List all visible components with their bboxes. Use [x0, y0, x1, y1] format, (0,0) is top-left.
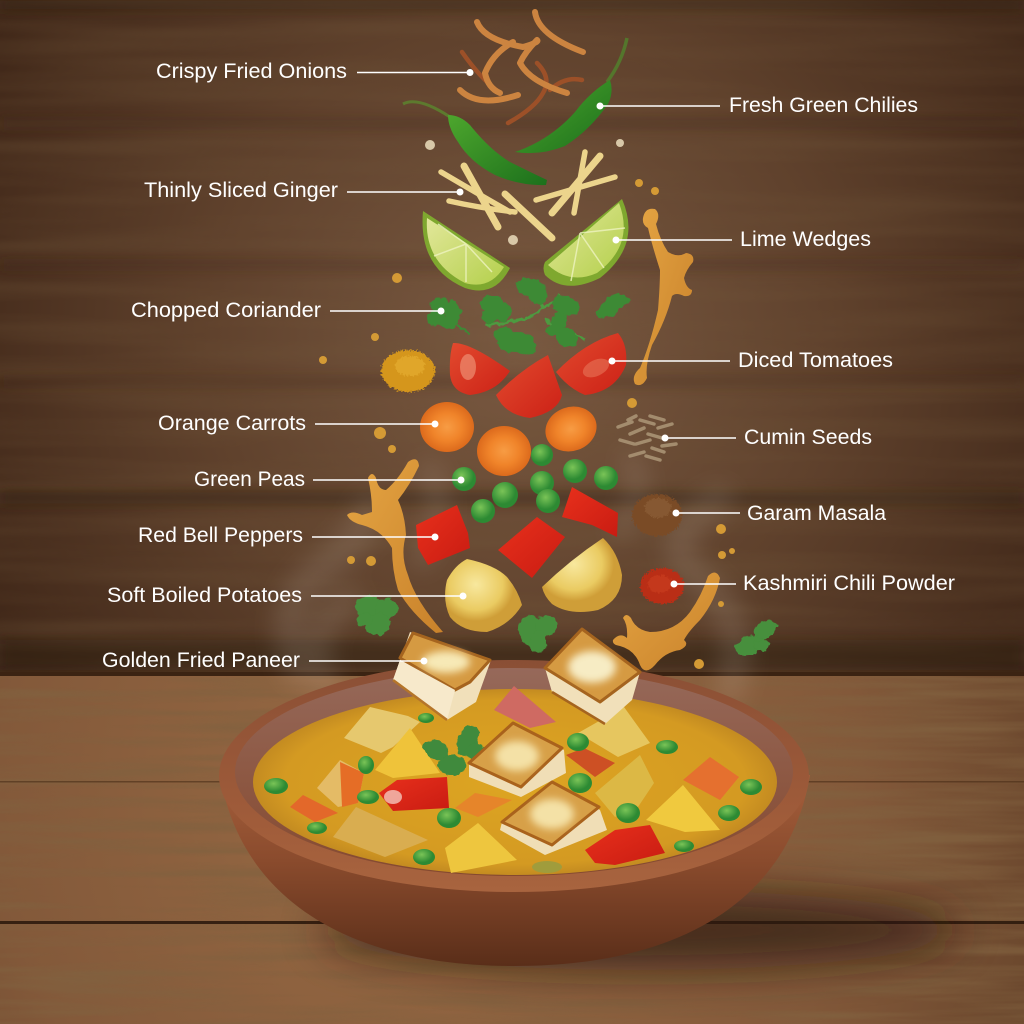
soft boiled potatoes	[445, 538, 622, 632]
garam masala pile	[632, 494, 682, 536]
wooden table	[0, 672, 1024, 1024]
diced tomatoes	[450, 333, 626, 418]
stew paneer 2	[500, 782, 607, 855]
stew potatoes	[317, 707, 720, 873]
label: Cumin Seeds	[662, 425, 872, 449]
label: Fresh Green Chilies	[596, 93, 918, 117]
label: Golden Fried Paneer: Golden Fried Paneer	[102, 648, 300, 672]
label: Fresh Green Chilies: Fresh Green Chilies	[729, 93, 918, 117]
green peas	[452, 444, 618, 523]
upper right drip	[634, 209, 693, 385]
coriander right leaf	[596, 292, 630, 320]
sauce droplets	[319, 139, 735, 669]
label: Green Peas	[194, 467, 464, 491]
red bell peppers	[416, 487, 618, 578]
bowl rim	[219, 660, 809, 892]
label: Thinly Sliced Ginger: Thinly Sliced Ginger	[144, 178, 338, 202]
label: Soft Boiled Potatoes	[107, 583, 466, 607]
label: Garam Masala: Garam Masala	[747, 501, 886, 525]
bowl outer body	[220, 775, 810, 966]
label: Orange Carrots: Orange Carrots	[158, 411, 306, 435]
label: Soft Boiled Potatoes: Soft Boiled Potatoes	[107, 583, 302, 607]
chili right	[515, 38, 627, 153]
sauce splashes	[347, 209, 720, 670]
label: Lime Wedges	[612, 227, 871, 251]
cumin seeds	[618, 416, 676, 460]
coriander left leaf	[427, 298, 470, 333]
paneer cube right	[545, 629, 640, 724]
label: Thinly Sliced Ginger	[144, 178, 464, 202]
chili left	[403, 102, 547, 185]
label: Lime Wedges: Lime Wedges	[740, 227, 871, 251]
bowl inner wall	[235, 668, 793, 876]
leaf center	[519, 615, 557, 653]
paneer cube left	[393, 632, 491, 720]
label: Green Peas: Green Peas	[194, 467, 305, 491]
label: Red Bell Peppers	[138, 523, 438, 547]
steam	[289, 460, 736, 690]
lime left	[423, 211, 510, 290]
left splash	[347, 459, 443, 633]
loose coriander leaves	[354, 596, 780, 659]
label: Crispy Fried Onions	[156, 59, 474, 83]
stew paneer 1	[469, 723, 566, 797]
stew tomato pieces	[494, 686, 556, 728]
orange carrots	[420, 399, 603, 476]
label: Cumin Seeds: Cumin Seeds	[744, 425, 872, 449]
right splash	[613, 572, 720, 670]
crispy fried onions	[460, 12, 583, 123]
label: Garam Masala	[672, 501, 886, 525]
label: Red Bell Peppers: Red Bell Peppers	[138, 523, 303, 547]
lime wedges	[423, 199, 628, 290]
curry contents	[264, 686, 762, 873]
stew red peppers	[379, 777, 449, 811]
leaf left	[354, 596, 398, 635]
curry surface	[253, 689, 777, 875]
wooden wall background	[0, 0, 1024, 674]
stew carrots	[340, 762, 364, 807]
chopped coriander	[427, 278, 630, 355]
label: Orange Carrots	[158, 411, 438, 435]
label: Crispy Fried Onions: Crispy Fried Onions	[156, 59, 347, 83]
label: Golden Fried Paneer	[102, 648, 428, 672]
coriander center sprig	[481, 278, 585, 355]
falling paneer cubes	[393, 629, 640, 724]
kashmiri chili powder pile	[640, 568, 684, 604]
turmeric pile	[381, 350, 435, 392]
tomato flesh details	[460, 354, 476, 380]
label: Diced Tomatoes: Diced Tomatoes	[738, 348, 893, 372]
label: Chopped Coriander: Chopped Coriander	[131, 298, 321, 322]
label: Diced Tomatoes	[608, 348, 893, 372]
stew peas	[264, 713, 762, 873]
green chilies	[403, 38, 627, 185]
lime right	[544, 199, 628, 286]
label: Chopped Coriander	[131, 298, 444, 322]
stew coriander	[420, 722, 487, 775]
leaf right	[733, 616, 780, 659]
sliced ginger	[441, 152, 615, 238]
clay bowl	[219, 660, 810, 966]
label: Kashmiri Chili Powder: Kashmiri Chili Powder	[743, 571, 955, 595]
